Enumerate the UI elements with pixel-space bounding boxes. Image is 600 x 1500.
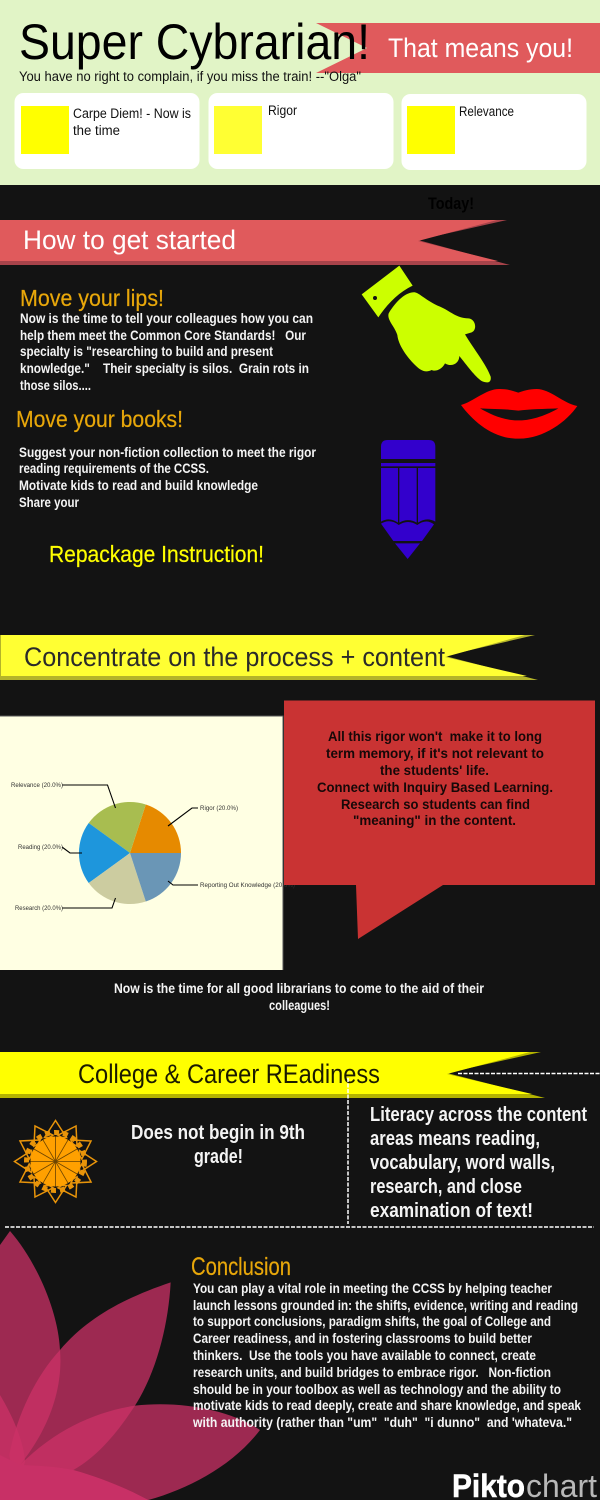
heading: repackage instruction: Repackage Instruction! xyxy=(49,541,264,567)
section: move your lips xyxy=(20,285,313,393)
text: good librarians xyxy=(114,980,484,1013)
card: relevance: Relevance xyxy=(459,104,514,119)
pie labels: Relevance (20.0%) xyxy=(11,782,63,789)
text: literacy across content: research, and close xyxy=(370,1176,522,1198)
icon: pointing hand xyxy=(362,266,491,382)
section: move your books: Share your xyxy=(19,494,79,510)
text: does not begin in 9th grade: grade! xyxy=(194,1146,243,1168)
section: move your lips: specialty is "researching to build and present xyxy=(20,343,273,359)
callout: speech bubble: the students' life. xyxy=(380,763,489,778)
text: good librarians: Now is the time for all good librarians to come to the aid of their xyxy=(114,980,484,996)
section: move your lips: help them meet the Common Core Standards! Our xyxy=(20,327,306,343)
logo: piktochart xyxy=(452,1468,597,1500)
callout: speech bubble xyxy=(284,700,595,939)
section: move your books xyxy=(16,406,316,510)
panel: pie chart xyxy=(0,716,295,970)
pie labels: Research (20.0%) xyxy=(15,905,63,912)
text: does not begin in 9th grade xyxy=(131,1122,305,1168)
text: literacy across content: areas means reading, xyxy=(370,1128,540,1150)
section: conclusion: thinkers. Use the tools you have available to connect, create xyxy=(193,1347,536,1363)
icon: red lips xyxy=(461,389,577,439)
pie labels: Reading (20.0%) xyxy=(18,844,63,851)
section: move your books: Motivate kids to read and build knowledge xyxy=(19,477,258,493)
card: relevance xyxy=(402,94,586,170)
banner: concentrate on the process + content: Concentrate on the process + content xyxy=(24,642,445,672)
pie labels: Reporting Out Knowledge (20.0%) xyxy=(200,882,295,889)
card: carpe diem: Carpe Diem! - Now is xyxy=(73,106,191,121)
subtitle quote: You have no right to complain, if you miss the train! --"Olga" xyxy=(19,69,361,84)
banner: college and career readiness xyxy=(0,1052,545,1098)
section: move your books: Suggest your non-fiction collection to meet the rigor xyxy=(19,444,316,460)
section: move your books: Move your books! xyxy=(16,406,183,432)
text: good librarians: colleagues! xyxy=(269,997,330,1013)
dashed dividers xyxy=(5,1074,600,1227)
text: literacy across content: vocabulary, word walls, xyxy=(370,1152,555,1174)
banner: that means you: That means you! xyxy=(388,33,573,63)
section: move your lips: Now is the time to tell your colleagues how you can xyxy=(20,310,313,326)
icon: orange starburst xyxy=(14,1120,97,1203)
icon: blue pencil xyxy=(381,440,435,559)
card: rigor: Rigor xyxy=(268,103,297,118)
section: move your lips: Move your lips! xyxy=(20,285,164,311)
banner: how to get started xyxy=(0,220,510,265)
section: conclusion: Career readiness, and in fostering classrooms to build better xyxy=(193,1330,532,1346)
panel: header xyxy=(0,0,600,185)
section: move your lips: those silos.... xyxy=(20,377,91,393)
section: conclusion: Conclusion xyxy=(191,1253,291,1281)
text: literacy across content: examination of text! xyxy=(370,1200,533,1222)
title: Super Cybrarian! xyxy=(19,14,370,70)
section: move your lips: knowledge." Their specialty is silos. Grain rots in xyxy=(20,360,309,376)
card: carpe diem: the time xyxy=(73,123,120,138)
decoration: pink flower petals xyxy=(0,1231,260,1500)
pie leader lines xyxy=(62,785,198,908)
text: does not begin in 9th grade: Does not begin in 9th xyxy=(131,1122,305,1144)
callout: speech bubble: Connect with Inquiry Based Learning. xyxy=(317,780,553,795)
text: literacy across content xyxy=(370,1104,587,1222)
card: carpe diem xyxy=(14,93,200,169)
today label: Today! xyxy=(428,194,474,213)
callout: speech bubble: Research so students can find xyxy=(341,797,530,812)
card: rigor xyxy=(208,93,394,169)
banner: how to get started: How to get started xyxy=(23,225,236,255)
section: move your books: reading requirements of the CCSS. xyxy=(19,460,209,476)
callout: speech bubble: term memory, if it's not relevant to xyxy=(326,746,544,761)
pie labels: Rigor (20.0%) xyxy=(200,805,238,812)
section: conclusion xyxy=(191,1253,581,1430)
banner: that means you xyxy=(316,23,600,73)
callout: speech bubble: "meaning" in the content. xyxy=(353,813,516,828)
pie labels xyxy=(11,782,295,912)
pie slices xyxy=(79,802,181,904)
banner: college and career readiness: College & Career REadiness xyxy=(78,1059,380,1089)
callout: speech bubble: All this rigor won't make it to long xyxy=(328,729,542,744)
banner: concentrate on the process + content xyxy=(0,635,538,680)
